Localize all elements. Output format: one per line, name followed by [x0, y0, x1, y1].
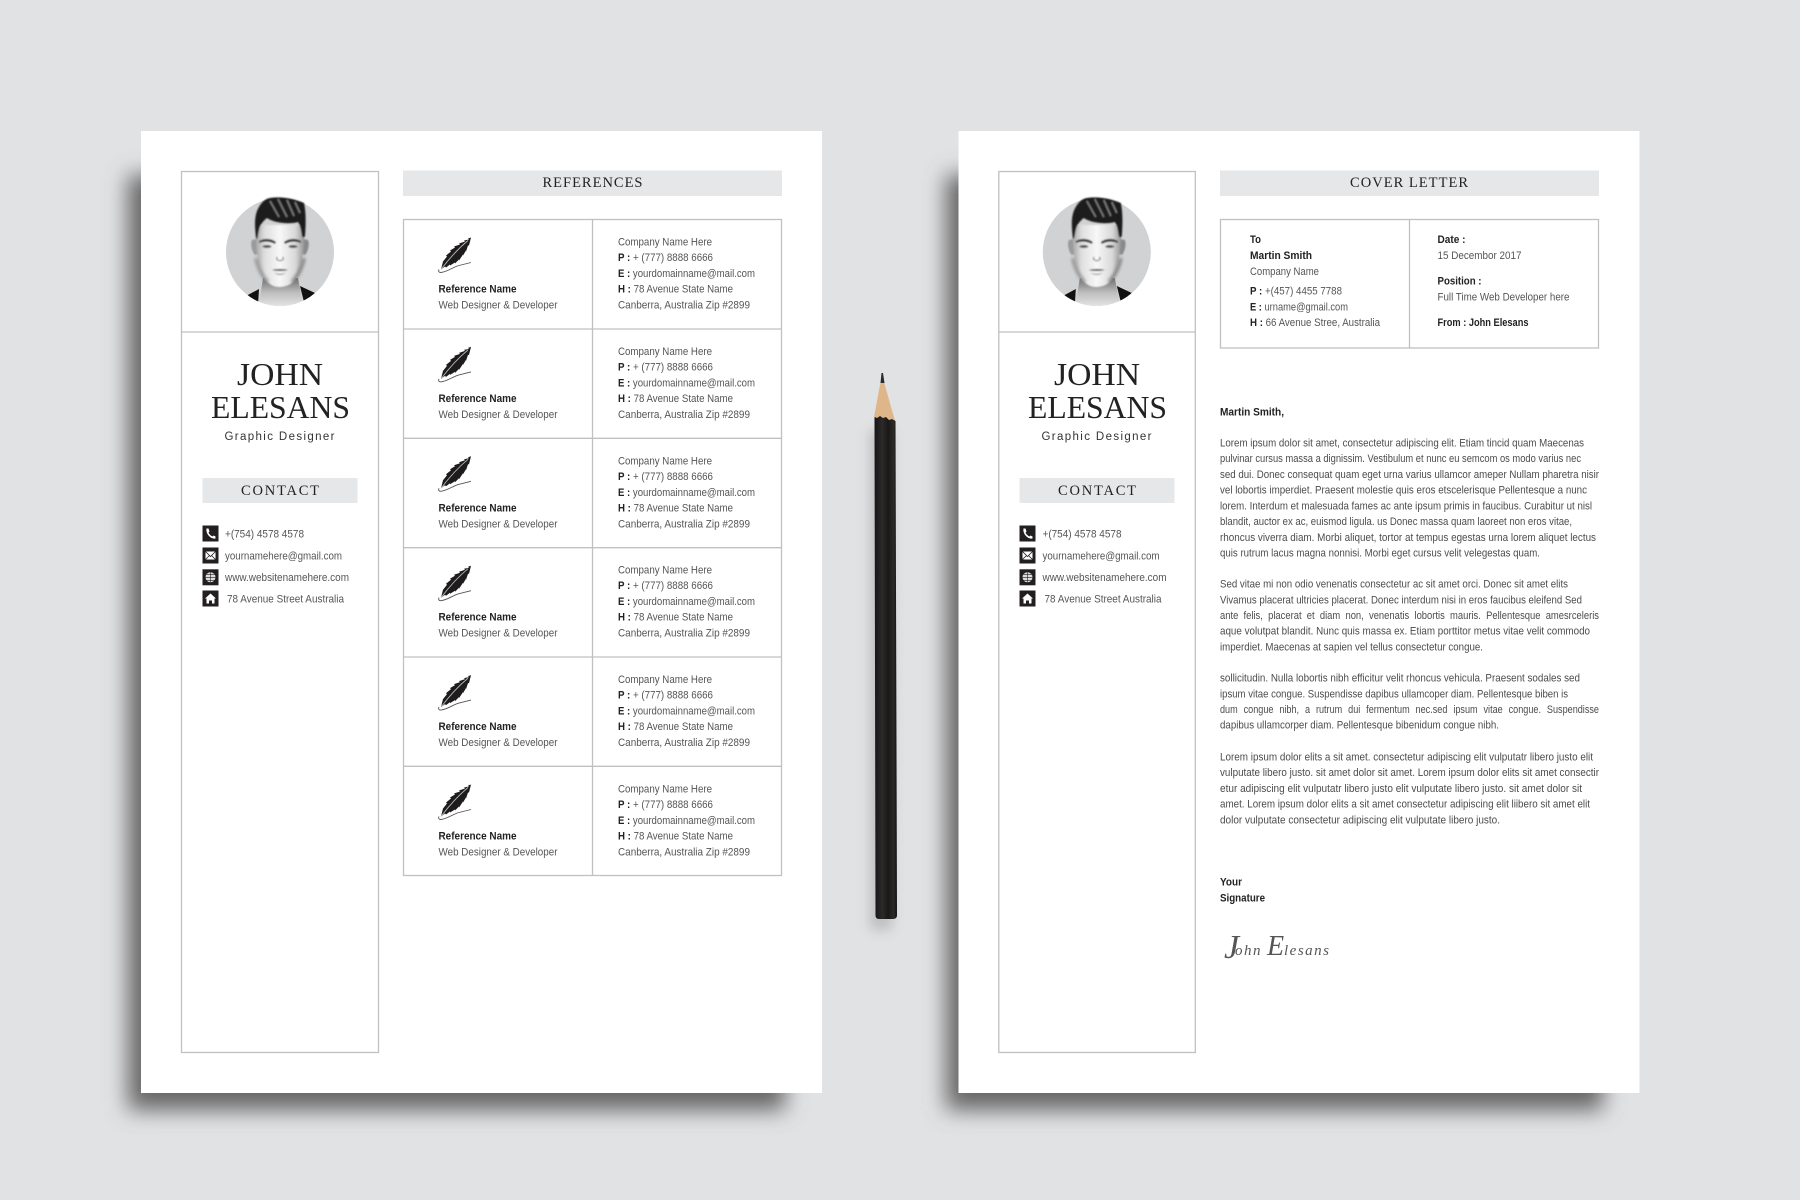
pencil body — [874, 416, 897, 919]
reference row 4: Company Name Here — [618, 565, 712, 577]
reference row 2: Canberra, Australia Zip #2899 — [618, 409, 750, 421]
handwritten signature: J — [1224, 929, 1241, 966]
name heading — [211, 356, 350, 425]
reference row 4: E : yourdomainname@mail.com — [618, 596, 755, 608]
salutation: Martin Smith, — [1220, 406, 1284, 418]
handwritten signature: lesans — [1284, 943, 1330, 959]
reference row 1: Web Designer & Developer — [438, 300, 558, 312]
reference row 5: Company Name Here — [618, 674, 712, 686]
letter paragraph 2 — [1220, 578, 1600, 654]
name heading: JOHN — [237, 356, 323, 392]
reference row 5: H : 78 Avenue State Name — [618, 721, 733, 733]
reference row 1: Canberra, Australia Zip #2899 — [618, 300, 750, 312]
cover letter heading: COVER LETTER — [1350, 175, 1468, 191]
date and position: Date : — [1438, 234, 1466, 246]
letter paragraph 2: Vivamus placerat ultricies placerat. Donec interdum nisi in eros faucibus eleifend Sed — [1220, 594, 1582, 606]
reference row 2: P : + (777) 8888 6666 — [618, 361, 713, 373]
letter paragraph 1: quis rutrum lacus magna nonnisi. Morbi eget cursus velit velegestas quam. — [1220, 548, 1540, 560]
icon: globe — [202, 569, 218, 585]
reference row 4: Canberra, Australia Zip #2899 — [618, 628, 750, 640]
table grid — [404, 220, 782, 876]
reference row 4 — [438, 565, 755, 640]
reference row 1: P : + (777) 8888 6666 — [618, 252, 713, 264]
reference row 6: P : + (777) 8888 6666 — [618, 799, 713, 811]
contact heading — [1020, 478, 1174, 503]
letter paragraph 4 — [1220, 752, 1599, 826]
reference row 6: E : yourdomainname@mail.com — [618, 815, 755, 827]
name heading: ELESANS — [211, 389, 350, 425]
letter paragraph 3: sollicitudin. Nulla lobortis nibh efficitur velit rhoncus vehicula. Praesent sodales sed — [1220, 672, 1580, 684]
reference row 4: P : + (777) 8888 6666 — [618, 580, 713, 592]
name heading — [1028, 356, 1167, 425]
letter paragraph 3 — [1220, 672, 1599, 732]
signature label: Your — [1220, 876, 1243, 888]
reference row 3 — [438, 455, 755, 530]
reference row 5: Web Designer & Developer — [438, 737, 558, 749]
reference row 4: H : 78 Avenue State Name — [618, 612, 733, 624]
letter paragraph 1: lorem. Interdum et malesuada fames ac ante ipsum primis in faucibus. Curabitur ut nisl — [1220, 500, 1592, 512]
job title: Graphic Designer — [224, 431, 335, 443]
contact list: +(754) 4578 4578 — [225, 528, 304, 540]
portrait photo — [226, 197, 334, 310]
reference row 6: Reference Name — [438, 830, 516, 842]
reference row 3: Canberra, Australia Zip #2899 — [618, 518, 750, 530]
reference row 6: Canberra, Australia Zip #2899 — [618, 846, 750, 858]
handwritten signature: ohn — [1235, 943, 1267, 959]
contact list: 78 Avenue Street Australia — [1044, 594, 1162, 606]
sidebar frame — [182, 172, 378, 1052]
letter paragraph 1 — [1220, 438, 1599, 560]
name heading: ELESANS — [1028, 389, 1167, 425]
reference row 2 — [438, 346, 755, 421]
reference row 2: E : yourdomainname@mail.com — [618, 377, 755, 389]
contact list — [1020, 526, 1166, 606]
contact list — [202, 526, 349, 606]
contact list: www.websitenamehere.com — [224, 572, 349, 584]
letter paragraph 1: rhoncus viverra diam. Morbi aliquet, tortor at tempus egestas urna lorem aliquet lectus — [1220, 532, 1597, 544]
reference row 4: Reference Name — [438, 612, 516, 624]
contact heading — [202, 478, 358, 503]
icon: home — [1020, 590, 1036, 606]
recipient details: Company Name — [1250, 266, 1319, 278]
icon: globe — [1020, 569, 1036, 585]
letter paragraph 1: pulvinar cursus massa a dignissim. Vestibulum et nunc eu semcom os modo varius nec — [1220, 453, 1582, 465]
name heading: JOHN — [1054, 356, 1140, 392]
reference row 4: Web Designer & Developer — [438, 628, 558, 640]
letter paragraph 2: Sed vitae mi non odio venenatis consectetur ac sit amet orci. Donec sit amet elits — [1220, 578, 1569, 590]
letter paragraph 3: dum congue nibh, a rutrum dui fermentum nec.sed ipsum vitae congue. Suspendisse — [1220, 704, 1599, 716]
letter paragraph 1: Lorem ipsum dolor sit amet, consectetur adipiscing elit. Etiam tincid quam Maecenas — [1220, 438, 1585, 450]
letter paragraph 4: Lorem ipsum dolor elits a sit amet. consectetur adipiscing elit vulputatr libero justo elit — [1220, 752, 1593, 764]
contact list: 78 Avenue Street Australia — [227, 594, 345, 606]
letter paragraph 2: aque volutpat blandit. Nunc quis massa ex. Etiam porttitor metus vitae velit commodo — [1220, 626, 1590, 638]
date and position: 15 Decembor 2017 — [1438, 250, 1522, 262]
letter details box — [1220, 220, 1598, 348]
reference row 3: Reference Name — [438, 502, 516, 514]
reference row 6: Company Name Here — [618, 784, 712, 796]
references table — [404, 220, 782, 876]
date and position: Position : — [1438, 276, 1482, 288]
recipient details — [1250, 234, 1381, 329]
contact list: www.websitenamehere.com — [1042, 572, 1166, 584]
reference row 6 — [438, 784, 755, 858]
icon: mail — [1020, 548, 1036, 564]
reference row 3: Web Designer & Developer — [438, 518, 558, 530]
recipient details: E : urname@gmail.com — [1250, 302, 1348, 314]
date and position — [1438, 234, 1570, 329]
reference row 1 — [438, 236, 755, 312]
cover letter heading — [1220, 170, 1599, 196]
panel: cover letter sheet — [958, 131, 1640, 1093]
letter paragraph 3: ipsum vitae congue. Suspendisse dapibus ullamcoper diam. Pellentesque biben is — [1220, 688, 1569, 700]
icon: mail — [202, 548, 218, 564]
pencil lead — [880, 373, 884, 383]
contact list: yournamehere@gmail.com — [1042, 550, 1160, 562]
reference row 2: Company Name Here — [618, 346, 712, 358]
recipient details: To — [1250, 234, 1261, 246]
letter paragraph 3: dapibus ullamcorper diam. Pellentesque bibenidum congue nibh. — [1220, 720, 1499, 732]
icon: phone — [202, 526, 218, 542]
icon: home — [202, 590, 218, 606]
reference row 3: P : + (777) 8888 6666 — [618, 471, 713, 483]
reference row 5 — [438, 674, 755, 749]
contact list: yournamehere@gmail.com — [225, 550, 342, 562]
icon: phone — [1020, 526, 1036, 542]
reference row 1: Company Name Here — [618, 236, 712, 248]
references heading: REFERENCES — [542, 175, 642, 191]
reference row 2: H : 78 Avenue State Name — [618, 393, 733, 405]
signature label — [1220, 876, 1265, 904]
letter paragraph 4: dolor vulputate consectetur adipiscing elit vulputate libero justo. — [1220, 814, 1500, 826]
reference row 3: Company Name Here — [618, 455, 712, 467]
reference row 1: Reference Name — [438, 284, 516, 296]
signature label: Signature — [1220, 892, 1265, 904]
shadow of right page — [946, 175, 1603, 1110]
letter paragraph 2: ante felis, placerat et diam non, venenatis lobortis mauris. Pellentesque amesrceleris — [1220, 610, 1600, 622]
recipient details: Martin Smith — [1250, 250, 1312, 262]
letter paragraph 4: amet. Lorem ipsum dolor elits a sit amet consectetur adipiscing elit liibero sit amet elit — [1220, 799, 1590, 811]
pencil shadow — [870, 430, 892, 930]
reference row 3: H : 78 Avenue State Name — [618, 502, 733, 514]
contact list: +(754) 4578 4578 — [1042, 528, 1122, 540]
contact heading: CONTACT — [1058, 483, 1136, 499]
reference row 6: Web Designer & Developer — [438, 846, 558, 858]
letter paragraph 4: etur adipiscing elit vulputatr libero justo elit vulputate libero justo. sit amet dolor sit — [1220, 783, 1582, 795]
reference row 3: E : yourdomainname@mail.com — [618, 487, 755, 499]
handwritten signature: E — [1266, 931, 1284, 962]
reference row 1: E : yourdomainname@mail.com — [618, 268, 755, 280]
reference row 5: E : yourdomainname@mail.com — [618, 706, 755, 718]
recipient details: H : 66 Avenue Stree, Australia — [1250, 317, 1381, 329]
letter paragraph 4: vulputate libero justo. sit amet dolor sit amet. Lorem ipsum dolor elits sit amet consectir — [1220, 767, 1599, 779]
pencil wood tip — [874, 382, 895, 421]
reference row 2: Reference Name — [438, 393, 516, 405]
letter paragraph 2: imperdiet. Maecenas at sapien vel tellus consectetur congue. — [1220, 642, 1483, 654]
reference row 6: H : 78 Avenue State Name — [618, 830, 733, 842]
reference row 1: H : 78 Avenue State Name — [618, 284, 733, 296]
contact heading: CONTACT — [241, 483, 319, 499]
job title: Graphic Designer — [1042, 431, 1152, 443]
references heading — [403, 170, 782, 196]
date and position: From : John Elesans — [1438, 317, 1528, 329]
shadow of left page — [128, 175, 785, 1110]
letter paragraph 1: vel lobortis imperdiet. Praesent molestie quis eros etscelerisque Pellentesque a nunc — [1220, 485, 1588, 497]
reference row 2: Web Designer & Developer — [438, 409, 558, 421]
date and position: Full Time Web Developer here — [1438, 292, 1570, 304]
reference row 5: Reference Name — [438, 721, 516, 733]
reference row 5: P : + (777) 8888 6666 — [618, 690, 713, 702]
pencil — [870, 373, 897, 930]
panel: references resume sheet — [141, 131, 822, 1093]
reference row 5: Canberra, Australia Zip #2899 — [618, 737, 750, 749]
portrait photo — [1043, 197, 1151, 310]
sidebar frame — [999, 172, 1195, 1052]
recipient details: P : +(457) 4455 7788 — [1250, 286, 1342, 298]
letter paragraph 1: blandit, auctor ex ac, euismod ligula. us Donec massa quam laoreet non eros vitae, — [1220, 516, 1572, 528]
letter paragraph 1: sed dui. Donec consequat quam eget urna varius ullamcor ameper Nullam pharetra nisir — [1220, 469, 1599, 481]
